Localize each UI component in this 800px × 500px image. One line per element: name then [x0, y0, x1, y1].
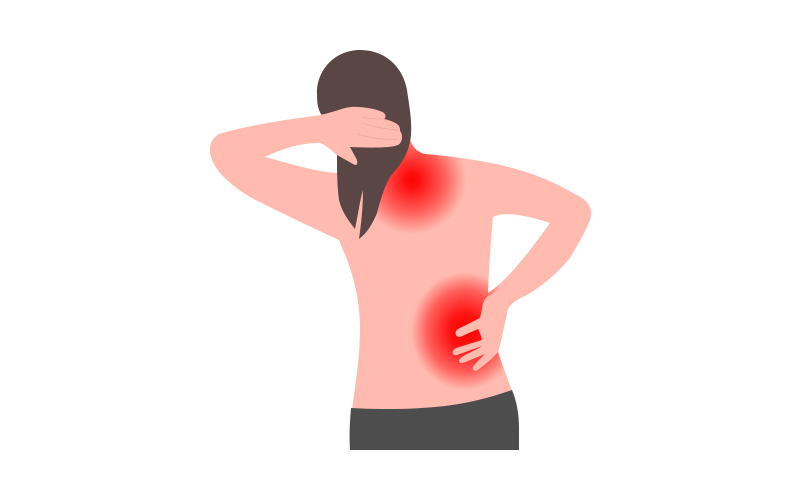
pain glow: neck and shoulder	[362, 140, 464, 232]
trousers	[350, 390, 519, 450]
pain glow: lower back	[411, 272, 519, 390]
body: back and arms	[210, 100, 591, 410]
hand on neck	[320, 107, 402, 165]
hair	[317, 50, 411, 239]
finger creases	[358, 117, 398, 139]
illustration: woman with neck and back pain	[210, 50, 592, 450]
hand on lower back	[453, 285, 510, 371]
